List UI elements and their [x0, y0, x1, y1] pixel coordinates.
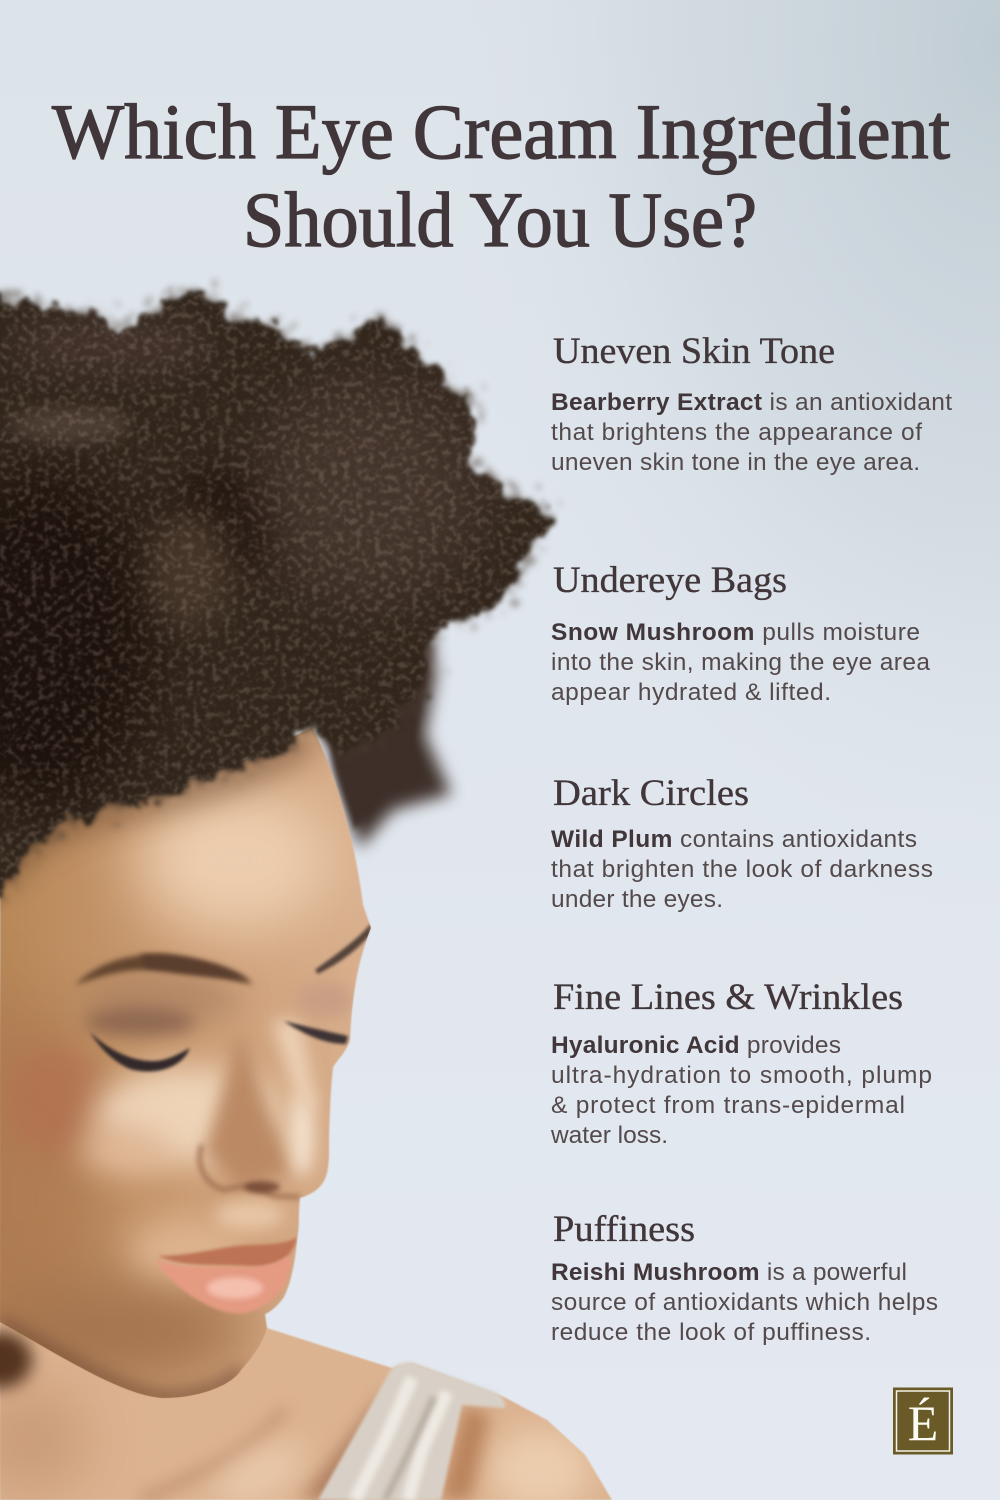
- icon: brand logo: [893, 1388, 953, 1454]
- title: [52, 88, 950, 263]
- panel: undereye bags: appear hydrated & lifted.: [551, 679, 831, 706]
- panel: puffiness: Puffiness: [553, 1209, 695, 1250]
- panel: puffiness: Reishi Mushroom is a powerful: [551, 1259, 907, 1286]
- panel: fine lines and wrinkles: Fine Lines & Wrinkles: [553, 977, 903, 1018]
- panel: fine lines and wrinkles: ultra-hydration to smooth, plump: [551, 1062, 932, 1089]
- face: [0, 270, 580, 1398]
- panel: puffiness: source of antioxidants which helps: [551, 1289, 938, 1316]
- afro hair mass: [0, 290, 553, 910]
- back hair, blurred: [320, 600, 451, 848]
- panel: dark circles: [551, 773, 933, 913]
- camisole strap: [318, 1362, 505, 1500]
- panel: uneven skin tone: Bearberry Extract is an antioxidant: [551, 389, 952, 416]
- panel: uneven skin tone: [551, 331, 952, 476]
- face shading: [0, 735, 353, 1398]
- panel: fine lines and wrinkles: [550, 977, 932, 1149]
- panel: puffiness: reduce the look of puffiness.: [551, 1319, 871, 1346]
- panel: dark circles: under the eyes.: [551, 886, 723, 913]
- panel: dark circles: Dark Circles: [553, 773, 749, 814]
- panel: uneven skin tone: Uneven Skin Tone: [553, 331, 835, 372]
- panel: puffiness: [551, 1209, 938, 1346]
- panel: uneven skin tone: uneven skin tone in the eye area.: [551, 449, 920, 476]
- panel: undereye bags: [551, 560, 930, 706]
- hair tone and curl texture: [0, 294, 550, 893]
- title: Should You Use?: [243, 176, 757, 263]
- panel: undereye bags: into the skin, making the eye area: [551, 649, 930, 676]
- closed eye lashes, right: [284, 1021, 348, 1044]
- outer hair fuzz: [0, 290, 553, 910]
- lips: [155, 1237, 297, 1314]
- panel: dark circles: that brighten the look of darkness: [551, 856, 933, 883]
- panel: fine lines and wrinkles: & protect from trans-epidermal: [551, 1092, 905, 1119]
- panel: uneven skin tone: that brightens the appearance of: [551, 419, 922, 446]
- closed eye lashes, left: [90, 1032, 190, 1071]
- panel: undereye bags: Undereye Bags: [553, 560, 787, 601]
- panel: fine lines and wrinkles: water loss.: [550, 1122, 668, 1149]
- nose: [200, 1145, 300, 1197]
- panel: dark circles: Wild Plum contains antioxidants: [551, 826, 917, 853]
- icon: brand logo: É: [908, 1395, 938, 1451]
- panel: fine lines and wrinkles: Hyaluronic Acid provides: [551, 1032, 841, 1059]
- panel: undereye bags: Snow Mushroom pulls moisture: [551, 619, 920, 646]
- eyebrows: [75, 922, 372, 985]
- neck and shoulder: [0, 1310, 612, 1500]
- title: Which Eye Cream Ingredient: [52, 88, 950, 175]
